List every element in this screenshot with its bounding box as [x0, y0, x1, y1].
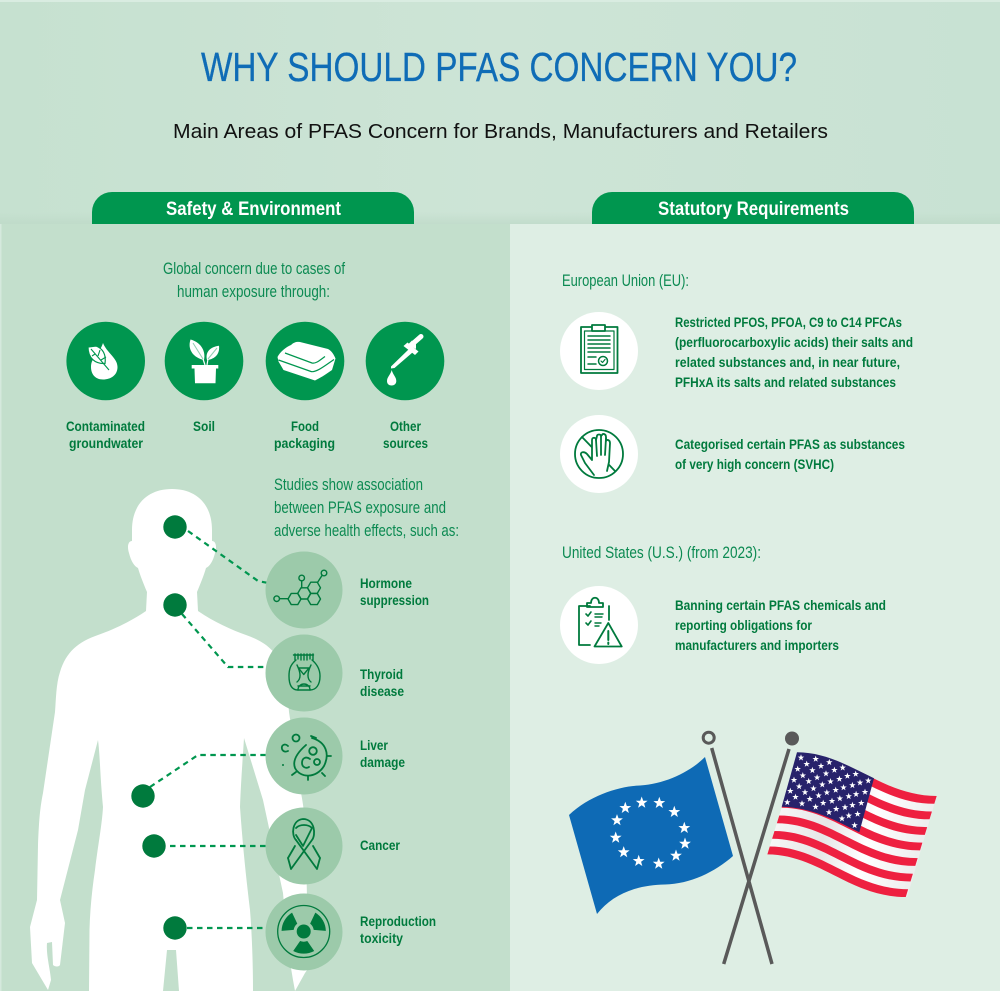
- text: svhc: of very high concern (SVHC): [675, 457, 834, 472]
- labels: health effects: disease: [360, 684, 404, 699]
- labels: exposure sources: Soil: [193, 419, 215, 434]
- labels: health effects: suppression: [360, 593, 429, 608]
- labels: health effects: Thyroid: [360, 667, 403, 682]
- labels: exposure sources: groundwater: [69, 436, 144, 451]
- text: studies show association: adverse health effects, such as:: [274, 522, 459, 540]
- labels: exposure sources: Other: [390, 419, 422, 434]
- icon: contaminated groundwater: [66, 322, 145, 400]
- text: svhc: [675, 437, 905, 472]
- labels: health effects: Liver: [360, 738, 389, 753]
- icon: dropper: [366, 322, 444, 400]
- text: us requirements: [675, 598, 886, 653]
- labels: health effects: toxicity: [360, 931, 403, 946]
- flag: european union: [569, 757, 733, 914]
- crossed flags: [569, 732, 937, 964]
- subtitle: Main Areas of PFAS Concern for Brands, Manufacturers and Retailers: [173, 120, 828, 143]
- flag: united states: [767, 752, 937, 897]
- labels: exposure sources: packaging: [274, 436, 335, 451]
- icon: checklist warning: [560, 586, 638, 664]
- text: us requirements: Banning certain PFAS chemicals and: [675, 598, 886, 613]
- text: eu restrictions: related substances and, in near future,: [675, 355, 900, 370]
- icon: prohibited hand: [560, 415, 638, 493]
- text: eu restrictions: [675, 315, 913, 390]
- icon: clipboard: [560, 312, 638, 390]
- tab heading: safety and environment: Safety & Environment: [166, 199, 342, 220]
- text: global concern: [163, 260, 345, 301]
- labels: exposure sources: Food: [291, 419, 319, 434]
- tab heading: statutory requirements: Statutory Requirements: [658, 199, 849, 220]
- text: us requirements: reporting obligations for: [675, 618, 813, 633]
- connector lines: [150, 531, 268, 928]
- header background: [0, 0, 1000, 225]
- labels: exposure sources: [66, 419, 428, 451]
- text: svhc: Categorised certain PFAS as substances: [675, 437, 905, 452]
- icon: cancer ribbon: [266, 808, 342, 884]
- labels: exposure sources: sources: [383, 436, 428, 451]
- icon: soil plant: [165, 322, 243, 400]
- title: WHY SHOULD PFAS CONCERN YOU?: [201, 44, 797, 90]
- human body silhouette: [30, 489, 314, 991]
- text: global concern: human exposure through:: [177, 283, 330, 301]
- icon: reproduction toxicity hazard: [266, 894, 342, 970]
- body markers: [131, 515, 187, 940]
- icon: hormone molecule: [266, 552, 342, 628]
- tab heading: safety and environment: [92, 192, 414, 224]
- panel: statutory requirements: [510, 192, 1000, 991]
- text: eu restrictions: (perfluorocarboxylic acids) their salts and: [675, 335, 913, 350]
- text: studies show association: between PFAS exposure and: [274, 499, 446, 517]
- icon: liver cells: [266, 718, 342, 794]
- text: eu restrictions: PFHxA its salts and related substances: [675, 375, 896, 390]
- labels: health effects: Hormone: [360, 576, 412, 591]
- heading: united states: United States (U.S.) (from 2023):: [562, 544, 761, 562]
- icon: thyroid: [266, 634, 342, 712]
- heading: european union: European Union (EU):: [562, 272, 689, 290]
- labels: health effects: Cancer: [360, 838, 401, 853]
- panel: safety and environment: [0, 192, 510, 991]
- flag poles: [703, 732, 799, 964]
- labels: exposure sources: Contaminated: [66, 419, 145, 434]
- text: studies show association: [274, 476, 459, 540]
- icon: food packaging: [266, 322, 344, 400]
- labels: health effects: Reproduction: [360, 914, 436, 929]
- text: eu restrictions: Restricted PFOS, PFOA, C9 to C14 PFCAs: [675, 315, 902, 330]
- labels: health effects: [360, 576, 436, 946]
- text: global concern: Global concern due to cases of: [163, 260, 345, 278]
- tab heading: statutory requirements: [592, 192, 914, 224]
- labels: health effects: damage: [360, 755, 405, 770]
- text: studies show association: Studies show association: [274, 476, 423, 494]
- text: us requirements: manufacturers and importers: [675, 638, 839, 653]
